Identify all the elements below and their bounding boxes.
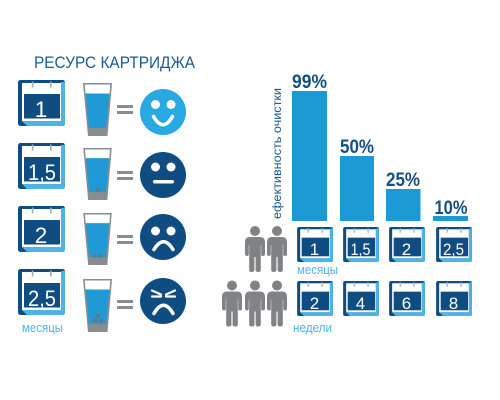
calendar 6: 6	[402, 294, 411, 313]
icon: neutral face	[140, 152, 186, 198]
calendar 1: 1	[310, 240, 319, 259]
icon: calendar 1: 1	[35, 97, 47, 122]
icon: equals sign	[117, 171, 133, 180]
axis label: cleaning efficiency: ефективность очистки	[270, 88, 284, 219]
icon: calendar 2,5: 2,5	[28, 286, 56, 311]
title: РЕСУРС КАРТРИДЖА	[34, 53, 196, 72]
icon: calendar 1	[18, 80, 65, 126]
calendars row: weeks	[297, 281, 472, 316]
icon: calendar 2,5	[18, 269, 65, 315]
calendar 2: 2	[310, 294, 319, 313]
bar chart	[292, 72, 468, 221]
bar 25%	[386, 170, 420, 221]
calendars row: months	[297, 227, 472, 262]
row: 1 month, happy	[18, 80, 186, 136]
icon: happy face	[140, 89, 186, 135]
icon: glass with three particles	[83, 279, 112, 332]
calendar 1	[297, 227, 333, 262]
calendar 1,5	[343, 227, 379, 262]
calendar 2	[389, 227, 425, 262]
bar 99%	[292, 72, 327, 221]
icon: clean water glass	[83, 83, 112, 136]
calendar 2: 2	[402, 240, 411, 259]
calendar 2,5: 2,5	[443, 240, 464, 259]
calendar 2	[297, 281, 333, 316]
icon: equals sign	[117, 105, 133, 114]
bar 10%: 10%	[434, 198, 468, 219]
icon: three people	[222, 280, 287, 326]
icon: glass with two particles	[83, 213, 112, 265]
icon: sad face	[140, 214, 186, 260]
calendar 8: 8	[449, 294, 458, 313]
icon: equals sign	[117, 235, 133, 244]
icon: calendar 2: 2	[35, 223, 47, 248]
label: months (right): месяцы	[297, 262, 338, 277]
icon: calendar 1,5	[18, 143, 65, 189]
bar 25%: 25%	[386, 170, 420, 191]
calendar 4	[343, 281, 379, 316]
calendar 2,5	[436, 227, 472, 262]
row: 1.5 months, neutral	[18, 143, 186, 200]
calendar 6	[389, 281, 425, 316]
calendar 1,5: 1,5	[350, 240, 370, 259]
bar 99%: 99%	[292, 72, 327, 93]
bar 50%: 50%	[340, 137, 374, 158]
icon: two people	[245, 226, 287, 272]
icon: calendar 2	[18, 206, 65, 252]
icon: angry face	[140, 278, 186, 324]
label: weeks: недели	[293, 320, 332, 335]
row: 2 months, sad	[18, 206, 186, 265]
label: months (left): месяцы	[22, 320, 63, 335]
icon: equals sign	[117, 300, 133, 309]
icon: calendar 1,5: 1,5	[28, 160, 56, 185]
calendar 4: 4	[356, 294, 365, 313]
icon: glass with one particle	[83, 148, 112, 200]
bar 50%	[340, 137, 374, 221]
calendar 8	[436, 281, 472, 316]
row: 2.5 months, angry	[18, 269, 186, 332]
